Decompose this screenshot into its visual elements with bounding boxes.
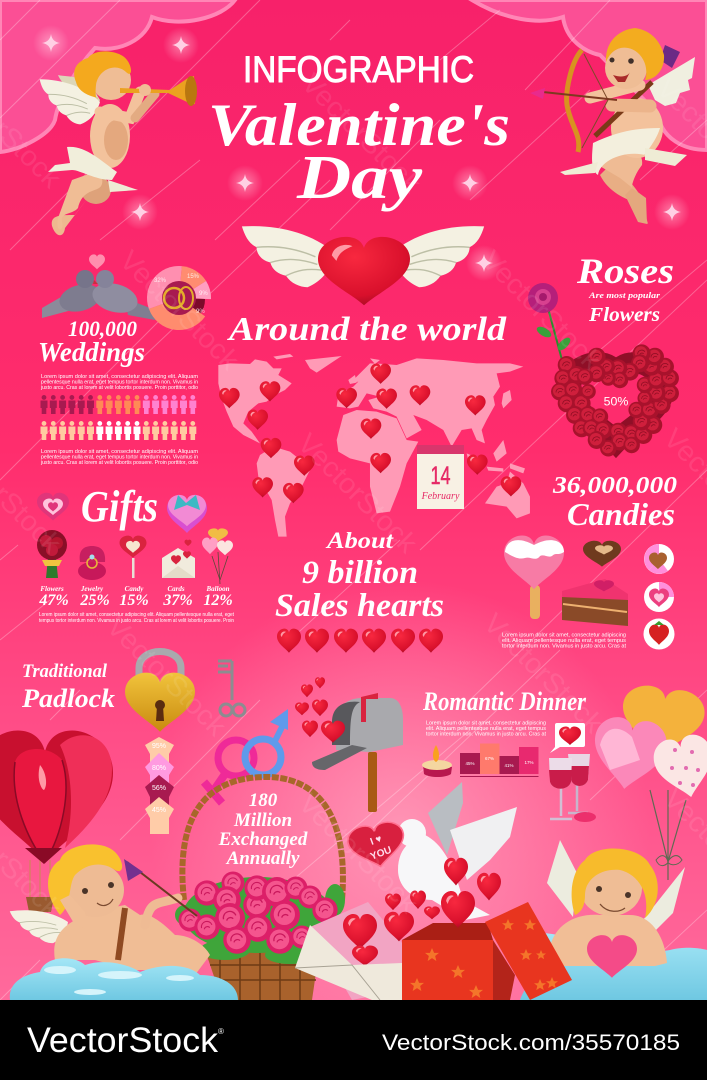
basket handle — [182, 777, 343, 900]
wings — [547, 840, 685, 933]
weddings text bottom: pellentesque nulla erat, eget tempus tortor interdum non. Vivamus in — [41, 454, 198, 460]
wreath percentage: 50% — [604, 395, 628, 409]
weddings heading: Weddings — [38, 337, 145, 367]
180 million text — [218, 790, 308, 869]
weddings heading — [38, 316, 145, 367]
candies text: elit. Aliquam pellentesque nulla erat, eget tempus — [502, 638, 626, 644]
arrow 56%: 56% — [152, 785, 166, 792]
footer url: VectorStock.com/35570185 — [382, 1030, 680, 1055]
gift labels: Cards — [167, 585, 185, 593]
title: day: Day — [296, 144, 423, 212]
weddings heading: 100,000 — [68, 316, 137, 341]
flower basket — [175, 777, 345, 1000]
calendar: 14 — [430, 462, 451, 490]
arrow percentage stack — [145, 737, 174, 834]
bar labels: 17% — [524, 760, 534, 765]
speech bubble heart — [550, 723, 585, 753]
roses heading: Roses — [576, 251, 674, 291]
bar labels: 67% — [485, 756, 494, 761]
bar labels: 41% — [504, 763, 514, 768]
roses heading: Flowers — [588, 304, 660, 326]
open envelope — [295, 902, 402, 1000]
bar labels: 45% — [465, 761, 475, 766]
gift labels: Jewelry — [80, 585, 104, 593]
gift box with hearts — [384, 858, 572, 1000]
gift labels: 12% — [203, 592, 233, 609]
i love you heart sign: I ♥ — [369, 833, 383, 848]
pie labels: 9% — [199, 291, 208, 297]
i love you heart sign: YOU — [369, 845, 393, 863]
gift labels: Candy — [125, 585, 144, 593]
gifts text: tempus tortor interdum non. Vivamus in justo arcu. Cras at lorem at velit lobortis posuere. Proin — [39, 618, 234, 624]
wing — [10, 906, 70, 946]
cloud: top left — [0, 0, 235, 152]
text: VectorStock — [476, 244, 608, 377]
text: VectorStock — [292, 427, 424, 560]
pie labels: 15% — [187, 274, 200, 280]
arrow 45%: 45% — [152, 807, 166, 814]
traditional padlock heading: Traditional — [22, 661, 108, 682]
icon: chocolate — [583, 541, 621, 567]
doves — [42, 254, 158, 320]
candies text — [502, 632, 627, 650]
candies heading: Candies — [567, 496, 675, 532]
about 9 billion heading: About — [325, 528, 394, 553]
candies text: tortor interdum non. Vivamus in justo arcu. Cras at — [502, 644, 627, 650]
wine glasses — [549, 754, 596, 822]
weddings text top: pellentesque nulla erat, eget tempus tortor interdum non. Vivamus in — [41, 380, 198, 386]
title — [208, 49, 510, 212]
mailbox — [312, 693, 403, 812]
sparkles — [33, 25, 690, 281]
gender symbols — [204, 709, 288, 803]
world map — [218, 354, 530, 537]
icon: heart ice lolly — [504, 535, 564, 619]
footer bar — [0, 1000, 707, 1080]
gift labels: 15% — [119, 592, 149, 609]
pie chart — [147, 266, 211, 330]
icon: padlock — [125, 652, 195, 732]
icon: cake slice — [562, 579, 628, 626]
dinner text: tortor interdum non. Vivamus in justo arcu. Cras at — [426, 732, 547, 738]
gifts text: Lorem ipsum dolor sit amet, consectetur adipiscing elit. Aliquam pellentesque nulla erat, eget — [39, 612, 235, 618]
i love you heart sign — [346, 820, 408, 871]
cupid with bow and arrow — [530, 28, 695, 224]
cloud — [10, 958, 238, 1000]
arrow 95%: 95% — [152, 743, 166, 750]
icon: balloons small — [202, 528, 233, 584]
about 9 billion heading: 9 billion — [302, 555, 418, 591]
gift labels: 47% — [38, 592, 69, 609]
dove — [388, 782, 517, 920]
gift labels — [38, 585, 233, 609]
text: VectorStock — [293, 787, 425, 920]
gifts heading: Gifts — [81, 482, 158, 531]
icon: ring box — [78, 546, 106, 580]
icon: candy rings — [644, 544, 674, 650]
cupid holding heart on cloud — [520, 840, 707, 1000]
text: VectorStock — [114, 244, 246, 377]
calendar: February — [421, 491, 460, 502]
cloud — [520, 933, 707, 1000]
cloud: top right — [472, 0, 707, 150]
traditional padlock heading: Padlock — [21, 684, 115, 713]
dinner text: Lorem ipsum dolor sit amet, consectetur adipiscing — [426, 720, 546, 726]
title: valentine's: Valentine's — [208, 92, 510, 158]
pie labels: 32% — [154, 278, 167, 284]
people row 1 — [40, 395, 196, 414]
cupid with trumpet — [37, 51, 197, 235]
romantic dinner heading: Romantic Dinner — [422, 687, 587, 716]
about 9 billion heading — [275, 528, 444, 624]
gift labels: 25% — [79, 592, 110, 609]
weddings text bottom: justo arcu. Cras at lorem at velit lobortis posuere. Proin porttitor, odio — [40, 460, 198, 466]
calendar — [417, 445, 464, 509]
text: VectorStock — [101, 610, 233, 743]
traditional padlock heading — [21, 661, 115, 713]
single rose — [528, 283, 572, 360]
hearts around mailbox — [295, 677, 345, 743]
dinner text — [426, 720, 547, 738]
bar labels — [465, 756, 534, 768]
arrow 80%: 80% — [152, 765, 166, 772]
row of hearts — [277, 629, 443, 653]
candies text: Lorem ipsum dolor sit amet, consectetur adipiscing — [502, 632, 626, 638]
text: VectorStock — [296, 67, 428, 200]
body — [54, 905, 210, 975]
icon: heart candle — [422, 745, 452, 777]
pie labels — [154, 274, 208, 315]
arrow — [127, 862, 197, 916]
icon: candy lollipop — [120, 536, 146, 578]
icon: heart lollipop top — [37, 493, 69, 520]
180 million text: Annually — [226, 848, 300, 869]
dinner text: elit. Aliquam pellentesque nulla erat, eget tempus — [426, 726, 546, 732]
gift labels: 37% — [162, 592, 193, 609]
icon: envelope with hearts — [162, 540, 195, 578]
title: infographic: INFOGRAPHIC — [243, 49, 474, 90]
pie labels: 9% — [196, 309, 205, 315]
gifts text — [39, 612, 235, 624]
gift labels: Flowers — [40, 585, 64, 593]
candies heading — [552, 473, 677, 532]
roses heading: Are most popular — [588, 290, 661, 300]
icon: bouquet — [37, 530, 67, 578]
gift labels: Balloon — [206, 585, 230, 593]
180 million text: 180 — [249, 790, 278, 811]
180 million text: Exchanged — [218, 829, 308, 850]
text: VectorStock — [478, 607, 610, 740]
candies heading: 36,000,000 — [552, 473, 677, 499]
weddings text top — [40, 374, 198, 391]
weddings text top: justo arcu. Cras at lorem at velit lobortis posuere. Proin porttitor, odio — [40, 385, 198, 391]
weddings text bottom — [40, 449, 198, 466]
footer logo: VectorStock — [27, 1021, 219, 1060]
icon: key — [218, 661, 245, 716]
winged heart — [242, 226, 484, 305]
around the world heading: Around the world — [227, 311, 507, 348]
people row 2 — [40, 421, 196, 440]
about 9 billion heading: Sales hearts — [275, 588, 444, 624]
weddings text top: Lorem ipsum dolor sit amet, consectetur adipiscing elit. Aliquam — [41, 374, 198, 380]
lying cupid on cloud — [10, 844, 238, 1000]
rose heart wreath — [551, 344, 679, 457]
icon: heart gift box — [167, 495, 207, 533]
roses heading — [576, 251, 674, 326]
180 million text: Million — [233, 810, 292, 831]
hot air balloon — [0, 731, 113, 912]
heart balloons — [589, 682, 707, 880]
weddings text bottom: Lorem ipsum dolor sit amet, consectetur adipiscing elit. Aliquam — [41, 449, 198, 455]
bar chart — [460, 744, 538, 777]
footer registered mark: ® — [218, 1027, 224, 1036]
pictogram rows — [40, 395, 196, 440]
